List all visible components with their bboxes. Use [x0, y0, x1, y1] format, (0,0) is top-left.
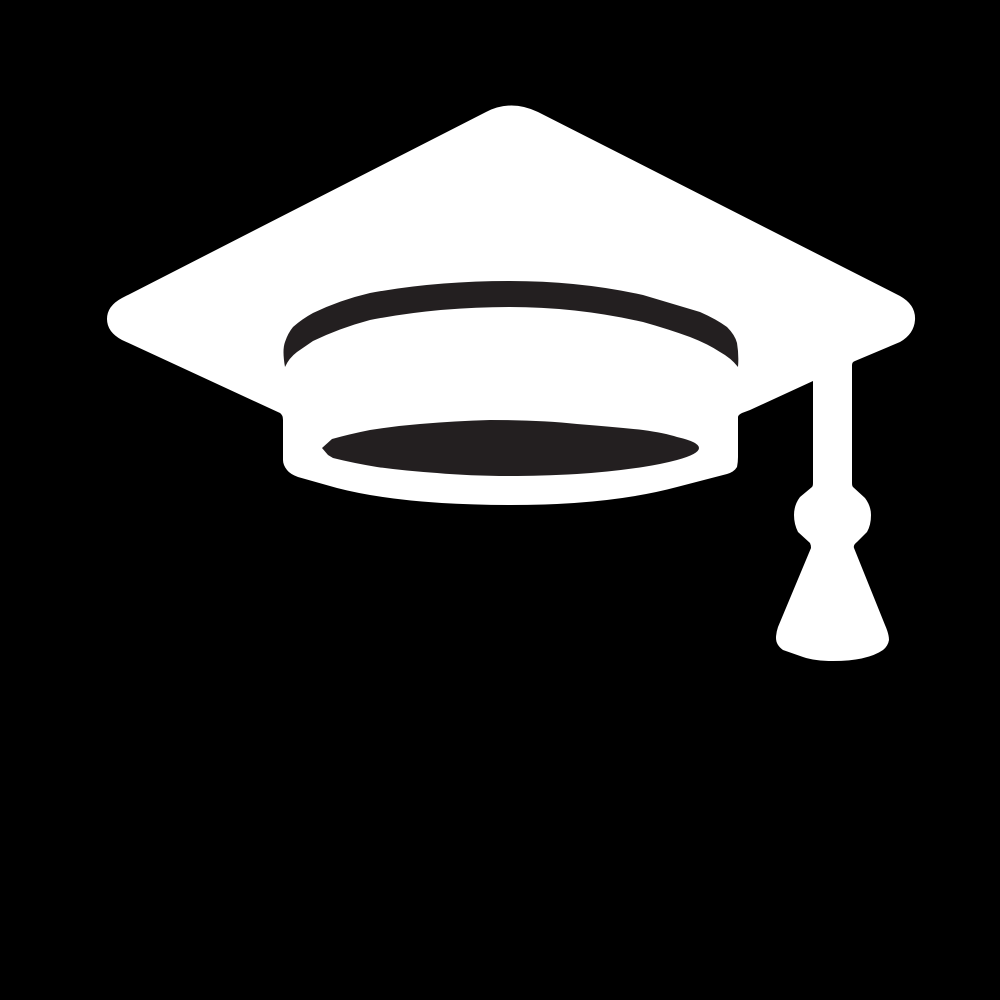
cap board, base and tassel [107, 106, 915, 661]
cap band shadow [284, 281, 738, 367]
cap opening [322, 420, 699, 476]
